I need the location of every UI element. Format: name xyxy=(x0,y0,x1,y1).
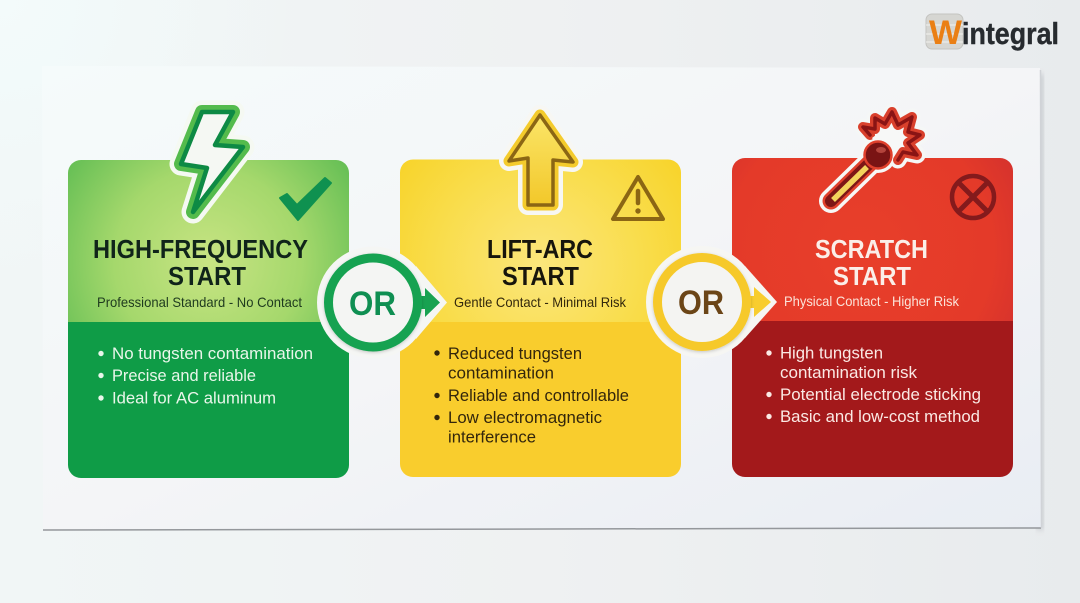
logo: Wintegral: integral xyxy=(962,16,1059,51)
heading: LIFT-ARC xyxy=(487,236,593,264)
paper sheet xyxy=(42,66,1044,530)
panel: high-frequency start xyxy=(68,112,349,478)
bullet list: contamination risk xyxy=(780,364,918,382)
subtitle: Professional Standard - No Contact xyxy=(97,294,302,310)
heading: START xyxy=(502,263,579,291)
bullet list: Basic and low-cost method xyxy=(780,408,980,426)
bullet list: Reduced tungsten xyxy=(448,345,582,363)
heading: HIGH-FREQUENCY xyxy=(93,236,308,264)
OR connector: yellow: OR xyxy=(678,284,724,322)
logo: Wintegral xyxy=(926,14,1059,52)
card lower section xyxy=(732,321,1013,477)
subtitle: Physical Contact - Higher Risk xyxy=(784,293,960,309)
icon: striking match xyxy=(831,112,920,201)
heading: START xyxy=(833,263,911,291)
OR connector: green xyxy=(317,246,447,358)
heading xyxy=(815,236,928,291)
bullet list: contamination xyxy=(448,364,554,382)
bullet list: interference xyxy=(448,428,536,446)
heading: SCRATCH xyxy=(815,236,928,264)
icon: crossed circle xyxy=(952,176,994,218)
bullet list xyxy=(434,345,629,446)
bullet list: Potential electrode sticking xyxy=(780,386,981,404)
card upper section xyxy=(68,160,349,322)
logo: Wintegral: W xyxy=(929,14,963,52)
icon: check mark xyxy=(280,178,331,220)
bullet list: Low electromagnetic xyxy=(448,409,602,427)
icon: lightning bolt xyxy=(181,112,243,212)
icon: warning triangle xyxy=(613,177,663,219)
bullet list: Precise and reliable xyxy=(112,367,256,385)
bullet list: Ideal for AC aluminum xyxy=(112,390,276,408)
OR connector: green: OR xyxy=(349,285,396,323)
bullet list: High tungsten xyxy=(780,344,883,362)
card upper section xyxy=(400,160,681,322)
bullet list: Reliable and controllable xyxy=(448,387,629,405)
heading: START xyxy=(168,263,246,291)
card lower section xyxy=(400,322,681,477)
subtitle: Gentle Contact - Minimal Risk xyxy=(454,294,627,310)
panel: scratch start xyxy=(732,112,1013,477)
card lower section xyxy=(68,322,349,478)
heading xyxy=(487,236,593,291)
bullet list xyxy=(98,345,313,408)
bullet list xyxy=(766,344,981,426)
heading xyxy=(93,236,308,291)
OR connector: yellow xyxy=(646,246,777,358)
panel: lift-arc start xyxy=(400,115,681,477)
icon: up arrow xyxy=(509,115,573,205)
bullet list: No tungsten contamination xyxy=(112,345,313,363)
card upper section xyxy=(732,158,1013,321)
